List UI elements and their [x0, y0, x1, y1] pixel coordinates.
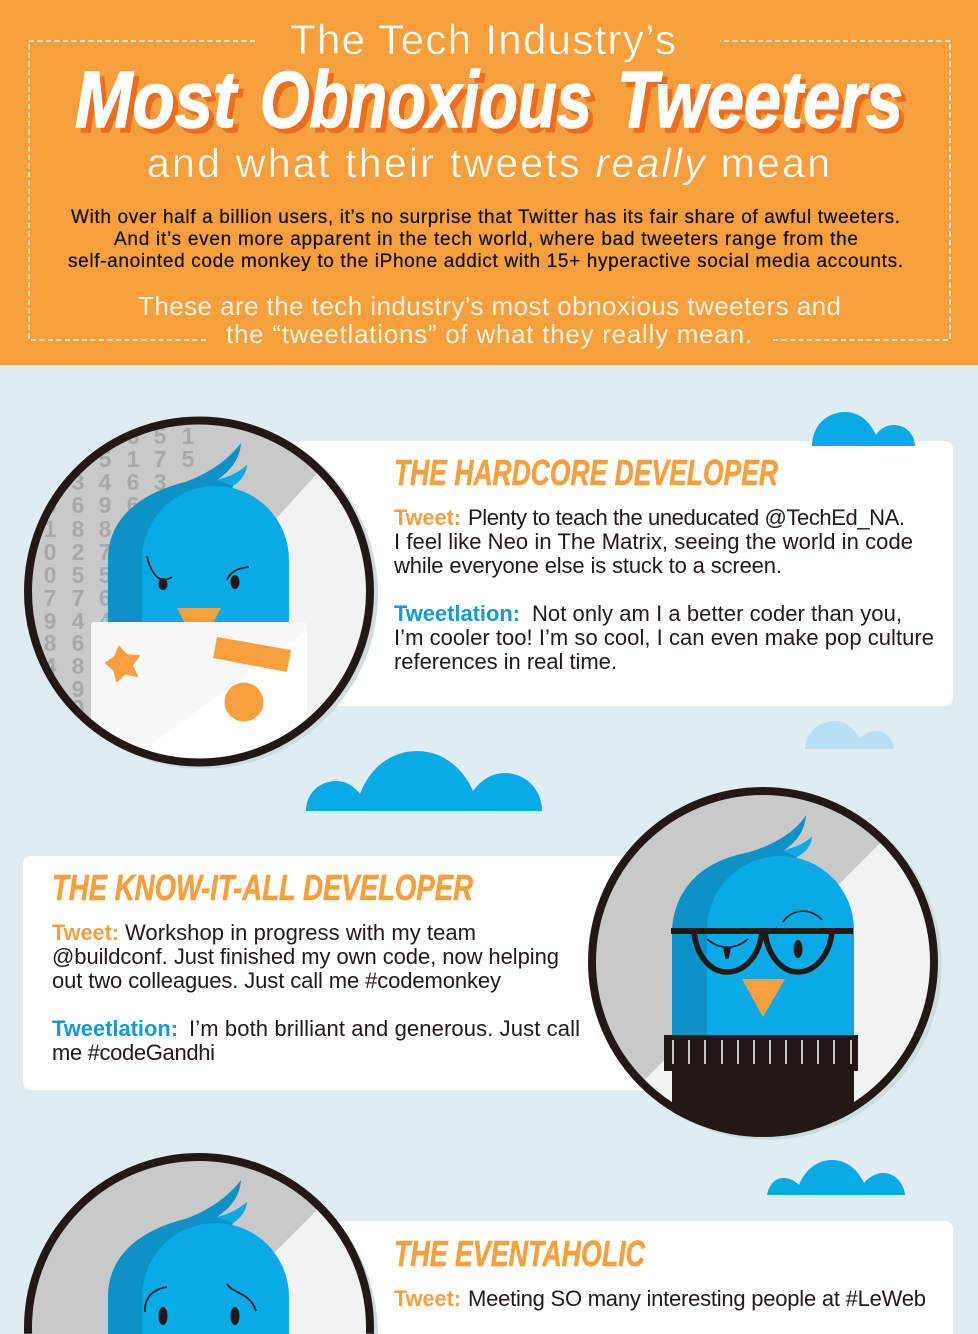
heading: THE KNOW-IT-ALL DEVELOPER	[52, 867, 473, 908]
tweetlation text: I’m cooler too! I’m so cool, I can even make pop culture	[394, 625, 934, 650]
number matrix: 7	[44, 585, 56, 611]
tweetlation text	[52, 1016, 580, 1065]
number matrix: 8	[72, 653, 85, 679]
eyes	[158, 578, 168, 590]
sub-heading paragraph	[138, 291, 841, 349]
eyes	[707, 939, 748, 947]
number matrix: 9	[44, 608, 56, 634]
number matrix: 8	[44, 630, 57, 656]
number matrix: 5	[44, 492, 57, 518]
main title: Most	[75, 55, 239, 144]
tweet text: Tweet:	[394, 505, 461, 530]
number matrix: 6	[99, 585, 111, 611]
beak	[177, 608, 221, 622]
tweet text: I feel like Neo in The Matrix, seeing the world in code	[394, 529, 913, 554]
tweetlation text: I’m both brilliant and generous. Just call	[189, 1016, 580, 1041]
cloud: lower right	[767, 1160, 905, 1195]
tweetlation text: Tweetlation:	[52, 1016, 178, 1041]
main title	[75, 55, 908, 149]
number matrix: 6	[72, 630, 84, 656]
tweet text: Meeting SO many interesting people at #LeWeb	[468, 1286, 926, 1311]
number matrix: 6	[127, 423, 139, 449]
laptop	[91, 622, 289, 721]
number matrix: 7	[99, 539, 111, 565]
cloud: large centre	[306, 751, 542, 811]
number matrix: 6	[127, 469, 139, 495]
number matrix: 9	[72, 676, 84, 702]
number matrix: 5	[99, 562, 112, 588]
bird body	[108, 443, 247, 640]
tweet text: Workshop in progress with my team	[125, 920, 476, 945]
illustration: hardcore developer bird	[20, 415, 380, 782]
intro paragraph: And it’s even more apparent in the tech world, where bad tweeters range from the	[114, 229, 858, 250]
panel: know-it-all developer card	[23, 856, 663, 1090]
number matrix: 8	[99, 516, 112, 542]
cloud: pale	[805, 721, 894, 749]
number matrix: 5	[154, 423, 167, 449]
tweet text: out two colleagues. Just call me #codemonkey	[52, 968, 501, 993]
number matrix: 4	[99, 608, 112, 634]
eyes	[158, 1307, 168, 1325]
tweet text: Tweet:	[52, 920, 119, 945]
laptop stickers	[106, 647, 139, 681]
title line one: The Tech Industry’s	[290, 16, 676, 63]
number matrix: 4	[72, 608, 85, 634]
number matrix: 2	[72, 539, 84, 565]
panel: orange header	[0, 0, 978, 365]
bird body	[672, 815, 812, 1040]
sub-heading paragraph: These are the tech industry’s most obnoxious tweeters and	[138, 291, 841, 321]
number matrix: 6	[127, 492, 139, 518]
sweater	[672, 1071, 854, 1129]
tweet text: Tweet:	[394, 1286, 461, 1311]
number matrix: 5	[72, 562, 85, 588]
title line three: and what their tweets really mean	[147, 140, 830, 186]
number matrix: 3	[72, 469, 84, 495]
number matrix: 0	[44, 562, 56, 588]
number matrix: 5	[182, 446, 195, 472]
illustration: eventaholic bird	[20, 1150, 380, 1334]
number matrix: 1	[127, 446, 140, 472]
number matrix: 5	[99, 446, 112, 472]
bird body	[108, 1180, 247, 1334]
intro paragraph: With over half a billion users, it’s no surprise that Twitter has its fair share of awful tweeters.	[71, 207, 900, 228]
panel: eventaholic card	[290, 1221, 953, 1334]
intro paragraph: self-anointed code monkey to the iPhone addict with 15+ hyperactive social media accounts.	[68, 251, 903, 272]
main title: Tweeters	[617, 55, 903, 144]
number matrix: 0	[44, 539, 56, 565]
tweetlation text: Not only am I a better coder than you,	[532, 601, 902, 626]
number matrix: 7	[72, 585, 84, 611]
panel: hardcore developer card	[290, 441, 953, 706]
number matrix: 3	[154, 469, 166, 495]
number matrix: 9	[72, 695, 84, 721]
main title: Most	[80, 60, 244, 149]
main title: Tweeters	[622, 60, 908, 149]
number matrix	[44, 423, 195, 721]
number matrix: 7	[154, 446, 166, 472]
number matrix: 8	[72, 516, 85, 542]
number matrix: 1	[182, 423, 195, 449]
sub-heading paragraph: the “tweetlations” of what they really mean.	[226, 319, 752, 349]
number matrix: 1	[44, 516, 57, 542]
number matrix: 4	[44, 653, 57, 679]
beak	[742, 979, 785, 1017]
tweet text: @buildconf. Just finished my own code, now helping	[52, 944, 559, 969]
number matrix: 4	[99, 469, 112, 495]
main title: Obnoxious	[260, 55, 592, 144]
number matrix: 6	[72, 492, 84, 518]
tweet text	[393, 505, 913, 578]
tweet text: Plenty to teach the uneducated @TechEd_NA.	[468, 505, 905, 530]
intro paragraph	[68, 207, 903, 272]
illustration: know-it-all bird	[575, 785, 945, 1150]
tweetlation text	[394, 601, 934, 674]
tweet text	[52, 920, 559, 993]
main title: Obnoxious	[265, 60, 597, 149]
heading: THE EVENTAHOLIC	[394, 1233, 646, 1274]
tweetlation text: references in real time.	[394, 649, 617, 674]
tweetlation text: me #codeGandhi	[52, 1040, 215, 1065]
glasses	[694, 931, 832, 972]
tweet text: while everyone else is stuck to a screen.	[393, 553, 782, 578]
cloud: top right	[812, 412, 915, 446]
heading: THE HARDCORE DEVELOPER	[394, 452, 778, 493]
number matrix: 9	[99, 492, 111, 518]
tweetlation text: Tweetlation:	[394, 601, 520, 626]
